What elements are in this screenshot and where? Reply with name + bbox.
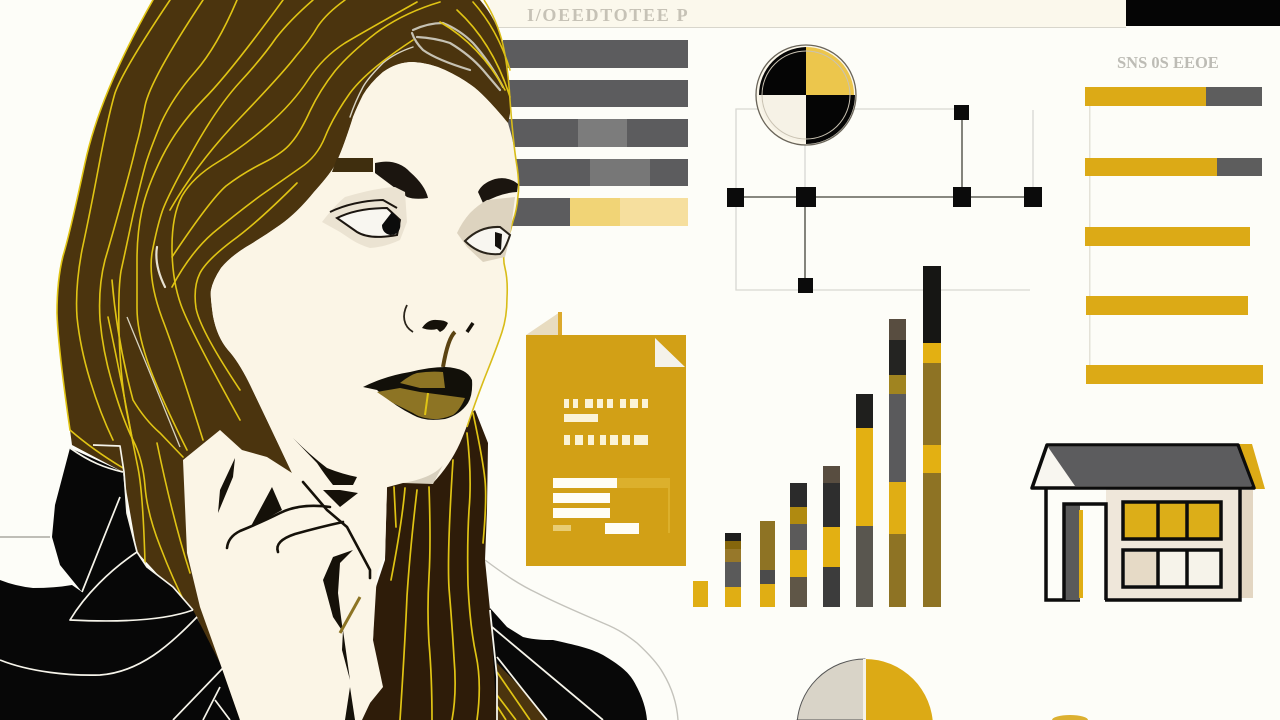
document card [526,312,686,566]
bottom pie chart [797,659,933,720]
stacked bar chart [693,266,941,607]
header title text: I/OEEDTOTEE P [527,5,689,25]
hand and neck [183,430,387,720]
header band [490,0,1280,28]
eye shadows [322,187,407,248]
light hair strand [127,317,180,447]
right jacket [490,608,647,720]
left jacket [0,445,240,720]
shoulder outline curve [485,560,678,720]
eyebrow hair extension [332,158,373,172]
lips [363,367,472,420]
chin shade [403,465,443,484]
house roof [1032,444,1265,489]
document corner fold [655,338,685,367]
quadrant pie icon [756,45,856,145]
left background line [0,536,50,538]
house upper windows [1123,502,1221,539]
face [211,62,519,500]
right eyebrow [478,178,518,203]
left eye [330,200,400,237]
olive strand [340,597,360,633]
lower right hair [360,410,497,720]
bottom edge icon fragment [1052,715,1088,720]
hair strands [57,0,510,607]
header black block [1126,0,1280,26]
right eye [465,227,510,254]
house door [1064,504,1106,600]
hair mass [57,0,511,720]
finger lines [227,482,370,578]
house walls [1046,488,1240,600]
nose [404,305,473,367]
document text [564,399,648,445]
network diagram [727,105,1042,293]
face edge [467,0,519,427]
figure: woman [0,0,647,720]
left eyebrow [375,162,428,199]
network nodes [727,105,1042,293]
house shade [1240,490,1253,598]
chin shadows [293,438,358,507]
knuckle shadows [218,458,355,720]
icon: house [1032,444,1265,600]
horizontal bars: top left group [503,40,688,226]
hair highlight [156,23,503,287]
sub heading text: SNS 0S EEOE [1117,53,1219,72]
house lower windows [1123,550,1221,587]
right horizontal bars [1085,87,1263,384]
document mini table [553,478,670,534]
